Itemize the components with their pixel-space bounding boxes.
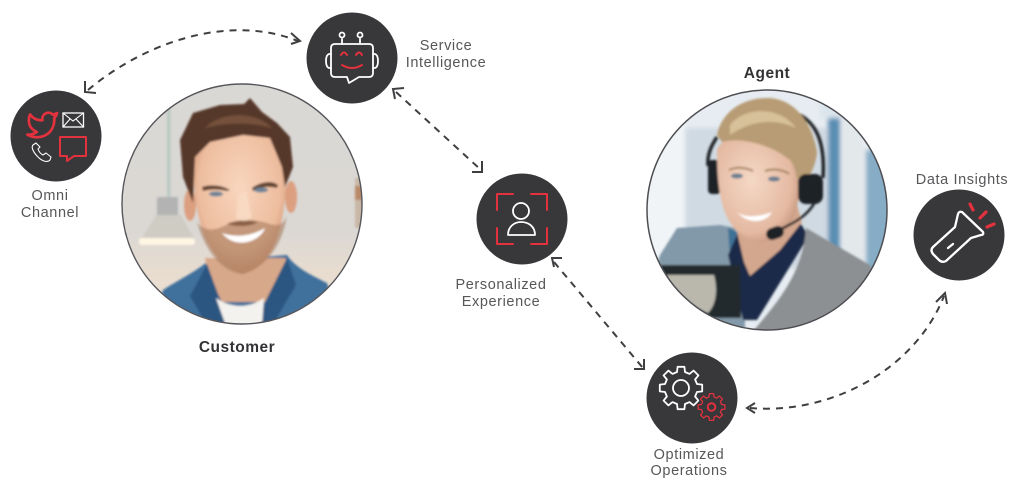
label: Personalized Experience: Experience bbox=[462, 294, 540, 310]
icon: small red gear bbox=[698, 393, 726, 421]
label: Service Intelligence: Service bbox=[420, 38, 472, 54]
label: Service Intelligence: Intelligence bbox=[406, 55, 486, 71]
arrow: Service Intelligence to Personalized Experience bbox=[393, 88, 482, 172]
arrow: Omni Channel to Service Intelligence bbox=[85, 30, 300, 93]
photo: customer portrait bbox=[120, 82, 364, 335]
icon: flashlight bbox=[932, 204, 994, 262]
icon: twitter bird bbox=[27, 113, 57, 137]
icon: envelope bbox=[63, 113, 84, 127]
arrow: Optimized Operations to Data Insights bbox=[747, 293, 947, 413]
icon: large gear bbox=[660, 367, 702, 409]
node: Omni Channel bbox=[10, 90, 102, 182]
label: Data Insights: Data Insights bbox=[916, 172, 1008, 188]
node: Data Insights bbox=[914, 190, 1004, 280]
node: Optimized Operations bbox=[646, 352, 738, 444]
icon: person in focus frame bbox=[497, 194, 547, 244]
label: Optimized Operations: Operations bbox=[651, 463, 727, 479]
heading: Agent: Agent bbox=[744, 65, 790, 82]
icon: speech bubble bbox=[60, 137, 86, 161]
label: Omni Channel: Channel bbox=[21, 205, 79, 221]
photo: agent portrait bbox=[645, 88, 890, 335]
node: Service Intelligence bbox=[306, 12, 398, 104]
arrow: Personalized Experience to Optimized Operations bbox=[552, 258, 644, 369]
icon: telephone bbox=[32, 143, 51, 161]
label: Omni Channel: Omni bbox=[31, 188, 69, 204]
icon: chatbot bbox=[326, 32, 378, 83]
node: Personalized Experience bbox=[476, 174, 568, 264]
label: Personalized Experience: Personalized bbox=[455, 277, 547, 293]
label: Optimized Operations: Optimized bbox=[654, 447, 724, 463]
heading: Customer: Customer bbox=[199, 339, 275, 356]
